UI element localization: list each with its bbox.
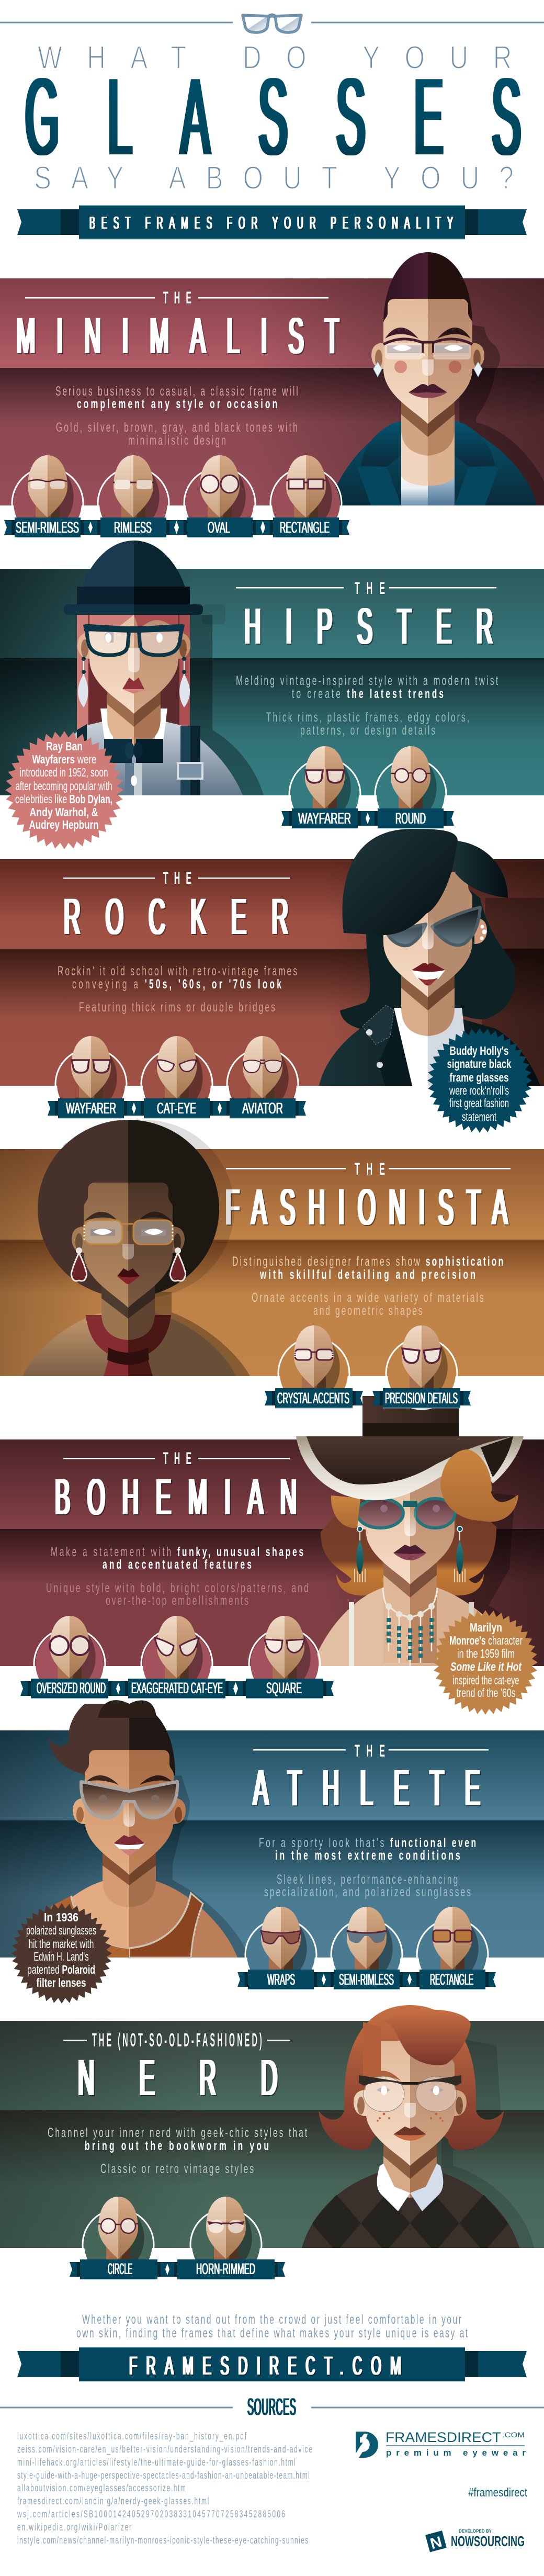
frame: oval xyxy=(176,455,263,539)
heading: bohemian: BOHEMIAN xyxy=(55,1468,297,1525)
title: glasses: GLASSES xyxy=(25,55,521,178)
frame: rectangle xyxy=(409,1907,496,1990)
callout: ray ban wayfarers: after becoming popular with xyxy=(16,779,112,793)
banner: best frames for your personality: BEST FRAMES FOR YOUR PERSONALITY xyxy=(89,213,453,233)
callout: ray ban wayfarers: Ray Ban xyxy=(46,739,83,753)
figure: rocker woman xyxy=(319,829,544,1086)
text block: closing statement xyxy=(76,2312,468,2341)
figure: athlete woman xyxy=(22,1700,250,1958)
title line: what do your: WHAT DO YOUR xyxy=(38,39,512,75)
heading: the: THE xyxy=(355,1160,385,1179)
frame: wraps: WRAPS xyxy=(267,1972,295,1989)
text block: sources list: mini-lifehack.org/articles/lifestyle/the-ultimate-guide-for-glasses-fashion.html xyxy=(17,2457,296,2468)
callout: polarized sunglasses: polarized sunglasses xyxy=(26,1923,96,1937)
frame: circle xyxy=(70,2197,168,2280)
text block: description: conveying a '50s, '60s, or '70s look xyxy=(72,977,281,992)
callout: buddy holly: signature black xyxy=(447,1057,512,1071)
frame: oversized round xyxy=(20,1616,119,1700)
text block: description: Featuring thick rims or double bridges xyxy=(79,1000,275,1015)
callout: polarized sunglasses: hit the market with xyxy=(28,1937,94,1951)
text block: description: Thick rims, plastic frames, edgy colors, xyxy=(266,710,469,725)
text block: sources list: wsj.com/articles/SB10001424052970203833104577072583452885006 xyxy=(17,2509,285,2520)
callout: buddy holly: first great fashion xyxy=(449,1096,509,1110)
callout: ray ban wayfarers: Andy Warhol, & xyxy=(29,805,98,819)
logo: framesdirect: .COM xyxy=(502,2431,525,2439)
callout: polarized sunglasses: patented Polaroid xyxy=(27,1963,95,1976)
frame: cat-eye xyxy=(133,1036,220,1120)
title line: say about you: SAY ABOUT YOU? xyxy=(34,160,514,196)
figure: minimalist woman xyxy=(328,252,544,505)
callout: ray ban wayfarers: celebrities like Bob Dylan, xyxy=(15,792,112,806)
text block: description: and geometric shapes xyxy=(313,1303,423,1318)
text block: description: and accentuated features xyxy=(103,1557,252,1572)
text block: description: Melding vintage-inspired style with a modern twist xyxy=(236,673,498,688)
text block: description: Channel your inner nerd with geek-chic styles that xyxy=(48,2125,307,2140)
text block: description: complement any style or occasion xyxy=(77,397,277,411)
heading: the: THE xyxy=(163,289,191,308)
callout: ray ban wayfarers: Wayfarers were xyxy=(32,752,96,766)
callout: polarized sunglasses: Edwin H. Land's xyxy=(33,1950,89,1963)
text block: description xyxy=(232,1254,503,1318)
callout: buddy holly: Buddy Holly's xyxy=(450,1044,508,1058)
frame: rectangle xyxy=(263,455,349,539)
frame: horn-rimmed xyxy=(167,2197,285,2280)
text block: description: Classic or retro vintage styles xyxy=(100,2162,254,2176)
text block: description: Make a statement with funky, unusual shapes xyxy=(51,1545,303,1559)
text block: description: with skillful detailing and precision xyxy=(259,1267,475,1282)
text block: sources list: zeiss.com/vision-care/en_us/better-vision/understanding-vision/trends-and-advice xyxy=(17,2444,312,2455)
frame: round: ROUND xyxy=(395,811,426,828)
frame: rimless: RIMLESS xyxy=(114,520,152,537)
text block: sources list: style-guide-with-a-huge-perspective-spectacles-and-fashion-an-unbeatable-team.html xyxy=(17,2470,310,2481)
frame: exaggerated cat-eye: EXAGGERATED CAT-EYE xyxy=(131,1680,223,1697)
callout: marilyn monroe xyxy=(423,1600,544,1725)
text block: sources list: framesdirect.com/landin g/a/nerdy-geek-glasses.html xyxy=(17,2496,209,2507)
figure: nerd woman xyxy=(302,2005,534,2252)
panel: the hipster xyxy=(0,541,544,860)
frame: crystal accents xyxy=(265,1325,363,1409)
frame: rimless xyxy=(90,455,177,539)
frame: oval: OVAL xyxy=(208,520,230,537)
text block: description: specialization, and polarized sunglasses xyxy=(264,1885,471,1899)
callout: buddy holly: statement xyxy=(462,1110,496,1123)
frame: wayfarer: WAYFARER xyxy=(298,811,351,828)
callout: buddy holly: were rock'n'roll's xyxy=(449,1084,509,1097)
heading: hipster: HIPSTER xyxy=(244,598,493,655)
frame: crystal accents: CRYSTAL ACCENTS xyxy=(277,1390,349,1408)
text block: sources list xyxy=(17,2431,312,2546)
panel: the minimalist xyxy=(0,252,544,539)
callout: polarized sunglasses xyxy=(2,1894,121,2013)
heading: sources: SOURCES xyxy=(247,2394,296,2421)
banner: best frames for your personality xyxy=(17,205,527,240)
logo: framesdirect: premium eyewear xyxy=(386,2448,526,2458)
text block: description: minimalistic design xyxy=(128,433,226,448)
text: hashtag: #framesdirect xyxy=(468,2485,527,2499)
text block: description: Sleek lines, performance-enhancing xyxy=(277,1872,458,1887)
text block: description: patterns, or design details xyxy=(300,723,435,738)
panel: the athlete xyxy=(0,1700,544,2013)
text block: description: Rockin’ it old school with retro-vintage frames xyxy=(58,964,297,978)
callout: buddy holly xyxy=(417,1018,542,1143)
heading: the: THE xyxy=(355,579,385,598)
frame: precision details xyxy=(372,1325,471,1409)
text block: description xyxy=(58,964,297,1015)
frame: round xyxy=(367,746,454,830)
panel: the not-so-old-fashioned nerd xyxy=(0,2005,544,2280)
frame: oversized round: OVERSIZED ROUND xyxy=(37,1680,106,1697)
callout: ray ban wayfarers xyxy=(0,720,134,860)
text block: closing statement: Whether you want to stand out from the crowd or just feel comfortable in your xyxy=(82,2312,461,2327)
callout: marilyn monroe: Some Like it Hot xyxy=(450,1660,522,1673)
text block: description xyxy=(259,1836,476,1899)
frame: circle: CIRCLE xyxy=(108,2261,132,2278)
frame: precision details: PRECISION DETAILS xyxy=(385,1390,458,1408)
callout: marilyn monroe: trend of the ’60s xyxy=(456,1686,516,1700)
frame: semi-rimless xyxy=(323,1907,410,1990)
heading: the: THE xyxy=(163,869,191,888)
figure: bohemian woman xyxy=(296,1396,536,1666)
panel: the bohemian xyxy=(0,1396,544,1725)
header: title block xyxy=(0,15,544,196)
panel: the fashionista xyxy=(0,1120,544,1409)
heading: the: THE xyxy=(163,1449,191,1468)
callout: ray ban wayfarers: introduced in 1952, soon xyxy=(20,766,108,779)
frame: wayfarer xyxy=(281,746,368,830)
text block: description: Serious business to casual, a classic frame will xyxy=(55,384,298,399)
banner: framesdirect.com: FRAMESDIRECT.COM xyxy=(129,2352,401,2380)
text block: description: to create the latest trends xyxy=(292,687,444,701)
heading: sources xyxy=(0,2394,544,2421)
logo: nowsourcing xyxy=(425,2529,525,2553)
figure: fashionista woman xyxy=(22,1120,250,1376)
logo: framesdirect: FRAMESDIRECT xyxy=(386,2429,501,2445)
text block: sources list: allaboutvision.com/eyeglasses/accessorize.htm xyxy=(17,2483,186,2494)
text block: description: over-the-top embellishments xyxy=(106,1593,248,1608)
frame: rectangle: RECTANGLE xyxy=(430,1972,473,1989)
text block: description xyxy=(48,2125,307,2176)
heading: fashionista: FASHIONISTA xyxy=(225,1178,508,1235)
callout: marilyn monroe: Monroe's character xyxy=(449,1634,523,1647)
heading: athlete: ATHLETE xyxy=(253,1759,480,1816)
icon: glasses xyxy=(243,15,301,32)
text block: description: in the most extreme conditions xyxy=(275,1848,460,1863)
heading: minimalist: MINIMALIST xyxy=(16,307,339,364)
frame: cat-eye: CAT-EYE xyxy=(157,1100,196,1118)
text block: description: For a sporty look that’s functional even xyxy=(259,1836,476,1850)
text block: description: Unique style with bold, bright colors/patterns, and xyxy=(46,1581,309,1595)
frame: exaggerated cat-eye xyxy=(118,1616,236,1700)
frame: aviator xyxy=(219,1036,306,1120)
banner: framesdirect.com xyxy=(17,2347,527,2382)
callout: marilyn monroe: Marilyn xyxy=(470,1621,502,1634)
frame: wayfarer xyxy=(48,1036,134,1120)
text block: description: Gold, silver, brown, gray, and black tones with xyxy=(56,420,298,435)
text block: description xyxy=(236,673,498,738)
text block: sources list: luxottica.com/sites/luxottica.com/files/ray-ban_history_en.pdf xyxy=(17,2431,247,2442)
logo: nowsourcing: DEVELOPED BY xyxy=(459,2529,492,2534)
heading: nerd: NERD xyxy=(78,2049,277,2106)
heading: the: THE xyxy=(355,1742,385,1761)
frame: wayfarer: WAYFARER xyxy=(66,1100,116,1118)
callout: buddy holly: frame glasses xyxy=(450,1071,508,1084)
text block: closing statement: own skin, finding the frames that define what makes your style unique is easy at xyxy=(76,2326,468,2341)
frame: semi-rimless xyxy=(4,455,91,539)
heading: the (not-so-old-fashioned): THE (NOT-SO-OLD-FASHIONED) xyxy=(92,2029,262,2051)
text block: description xyxy=(46,1545,309,1608)
callout: polarized sunglasses: filter lenses xyxy=(37,1976,86,1989)
text block: description xyxy=(55,384,298,448)
frame: square xyxy=(235,1616,334,1700)
figure: hipster woman xyxy=(24,541,264,795)
callout: marilyn monroe: in the 1959 film xyxy=(457,1647,515,1660)
logo: framesdirect xyxy=(356,2429,526,2458)
frame: rectangle: RECTANGLE xyxy=(280,520,330,537)
frame: wraps xyxy=(237,1907,324,1990)
text block: description: Distinguished designer frames show sophistication xyxy=(232,1254,503,1269)
frame: aviator: AVIATOR xyxy=(242,1100,283,1118)
callout: polarized sunglasses: In 1936 xyxy=(44,1910,78,1924)
text block: sources list: instyle.com/news/channel-marilyn-monroes-iconic-style-these-eye-catching-sunnies xyxy=(17,2535,308,2546)
text block: sources list: en.wikipedia.org/wiki/Polarizer xyxy=(17,2522,132,2533)
text block: description: bring out the bookworm in you xyxy=(85,2139,269,2153)
frame: square: SQUARE xyxy=(266,1680,302,1697)
frame: horn-rimmed: HORN-RIMMED xyxy=(196,2261,255,2278)
frame: semi-rimless: SEMI-RIMLESS xyxy=(339,1972,394,1989)
panel: the rocker xyxy=(0,829,544,1143)
callout: ray ban wayfarers: Audrey Hepburn xyxy=(29,818,98,831)
logo: nowsourcing: N xyxy=(428,2534,444,2552)
heading: rocker: ROCKER xyxy=(64,888,288,945)
frame: semi-rimless: SEMI-RIMLESS xyxy=(16,520,79,537)
text block: description: Ornate accents in a wide variety of materials xyxy=(252,1290,484,1305)
